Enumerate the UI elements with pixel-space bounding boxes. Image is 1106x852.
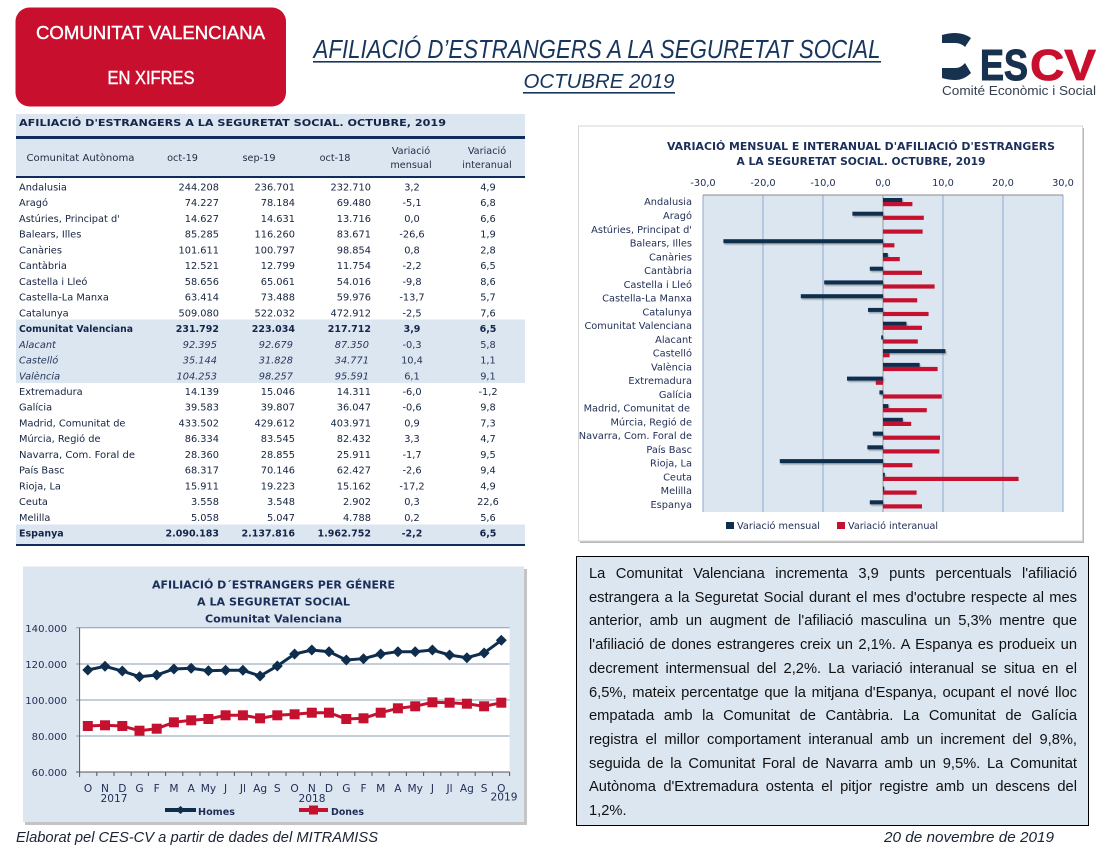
text block: commentary: decrement intermensual del 2,2%. La variació interanual se situa en el <box>589 661 1077 677</box>
bar chart category labels: Castelló <box>653 348 692 360</box>
table rows: 2.137.816 <box>242 529 295 540</box>
line chart x axis labels: 2017 <box>101 793 127 805</box>
table rows: 6,5 <box>480 529 496 540</box>
table rows: -17,2 <box>399 481 425 492</box>
table rows: -1,2 <box>478 387 498 398</box>
table rows: Extremadura <box>19 387 83 398</box>
highlighted rows background <box>16 320 525 383</box>
table rows: 4,9 <box>480 182 496 194</box>
table header: oct-19 <box>167 153 198 164</box>
footer: source: Elaborat pel CES-CV a partir de dades del MITRAMISS <box>16 830 378 846</box>
table rows: 9,1 <box>480 371 496 382</box>
table rows: 14.631 <box>261 214 295 225</box>
main title: AFILIACIÓ D’ESTRANGERS A LA SEGURETAT SOCIAL <box>312 35 881 64</box>
table header: interanual <box>462 160 512 171</box>
table rows: 6,5 <box>480 261 496 272</box>
table rows: -26,6 <box>399 230 425 241</box>
panel: bar chart monthly and yearly variation <box>578 126 1084 543</box>
table rows: -5,1 <box>402 198 422 209</box>
table rows: 12.521 <box>185 261 219 272</box>
bar chart title: VARIACIÓ MENSUAL E INTERANUAL D'AFILIACIÓ D'ESTRANGERS <box>667 140 1055 153</box>
bar chart category labels: Madrid, Comunitat de <box>584 404 690 414</box>
bar chart top axis labels: -10,0 <box>810 178 836 189</box>
table rows: 231.792 <box>176 324 219 335</box>
table rows: 63.414 <box>185 293 219 304</box>
table header: Variació <box>468 145 506 157</box>
bar chart category labels: Comunitat Valenciana <box>584 321 692 332</box>
bar chart top axis labels: 10,0 <box>932 178 954 189</box>
table rows: 0,2 <box>404 513 420 524</box>
table title band: AFILIACIÓ D'ESTRANGERS A LA SEGURETAT SOCIAL. OCTUBRE, 2019 <box>19 116 446 129</box>
table rows: Canàries <box>19 244 62 256</box>
bar chart top axis labels: -20,0 <box>750 178 776 189</box>
main title: OCTUBRE 2019 <box>524 71 674 93</box>
table rows: -0,3 <box>402 340 422 351</box>
line chart x axis labels: O <box>290 783 299 795</box>
line: Dones <box>88 702 501 731</box>
bar chart category labels: Castella-La Manxa <box>602 294 692 304</box>
text block: commentary: La Comunitat Valenciana incrementa 3,9 punts percentuals l'afiliació <box>589 566 1077 582</box>
line chart x axis labels: Jl <box>239 783 246 795</box>
table rows: 83.671 <box>337 230 371 241</box>
table rows: 74.227 <box>185 198 219 209</box>
table rows: 58.656 <box>185 277 219 288</box>
table rows: 4,9 <box>480 481 496 492</box>
table header <box>16 136 525 178</box>
line chart y axis labels: 100.000 <box>25 696 67 707</box>
line chart x axis labels: M <box>169 783 178 795</box>
text block: commentary <box>576 556 1089 826</box>
table rows: 1,1 <box>480 356 496 366</box>
table rows: 522.032 <box>254 308 295 319</box>
table rows: Cantàbria <box>19 260 67 272</box>
table rows: 101.611 <box>178 245 219 256</box>
line chart x axis labels: My <box>201 783 216 795</box>
table rows: Múrcia, Regió de <box>19 433 101 445</box>
table rows: 2.090.183 <box>166 529 219 540</box>
table rows: 9,8 <box>480 403 496 414</box>
table rows: 236.701 <box>254 182 295 194</box>
line chart x axis labels: A <box>188 783 196 795</box>
table rows: Andalusia <box>19 182 67 194</box>
table rows: 14.627 <box>185 214 219 225</box>
table rows: Navarra, Com. Foral de <box>19 450 135 461</box>
table rows: -6,0 <box>402 387 422 398</box>
line chart x axis labels: Jl <box>446 783 453 795</box>
table rows: Madrid, Comunitat de <box>19 418 125 430</box>
table rows: Castella-La Manxa <box>19 293 109 304</box>
bar chart category labels: Alacant <box>655 335 692 346</box>
badge: Comunitat Valenciana en xifres: COMUNITAT VALENCIANA <box>36 22 266 43</box>
text block: commentary: registra el millor comportament interanual amb un increment del 9,8%, <box>589 732 1077 748</box>
bar chart category labels: Múrcia, Regió de <box>610 416 692 428</box>
table rows: 2,8 <box>480 245 496 256</box>
table rows: -2,6 <box>402 466 422 477</box>
table rows: Rioja, La <box>19 481 61 492</box>
table rows: 22,6 <box>477 497 499 508</box>
table rows: 65.061 <box>261 277 295 288</box>
table rows: 223.034 <box>252 324 295 335</box>
bar chart category labels <box>579 197 692 511</box>
bar chart plot area <box>703 195 1063 512</box>
bar chart top axis labels: 20,0 <box>992 178 1014 189</box>
bar chart category labels: Canàries <box>649 251 692 263</box>
table rows: 68.317 <box>185 466 219 477</box>
line chart x axis labels: A <box>394 783 402 795</box>
text block: commentary: estrangera a la Seguretat Social durant el mes d'octubre respecte al mes <box>589 590 1077 606</box>
table rows: 5.058 <box>191 513 219 524</box>
line chart x axis labels: O <box>497 783 505 795</box>
table rows: 28.360 <box>185 450 219 461</box>
table rows: 8,6 <box>480 277 496 288</box>
table rows: 10,4 <box>401 356 423 366</box>
line chart x axis labels: Ag <box>253 783 267 795</box>
table rows: 6,6 <box>480 214 496 225</box>
table rows: -2,2 <box>402 529 422 540</box>
table rows: 34.771 <box>335 356 369 366</box>
table rows: 104.253 <box>176 371 217 382</box>
table rows: 3.558 <box>191 497 219 508</box>
table rows: Comunitat Valenciana <box>19 324 133 335</box>
table rows: Alacant <box>18 340 57 351</box>
table rows: 403.971 <box>330 418 371 430</box>
line chart x axis labels: F <box>154 783 160 795</box>
bar chart category labels: Balears, Illes <box>630 238 692 250</box>
table rows: 0,8 <box>404 245 420 256</box>
line chart legend: Homes <box>198 807 235 818</box>
text block: commentary: seguida de la Comunitat Foral de Navarra amb un 9,5%. La Comunitat <box>589 756 1077 772</box>
line chart x axis labels <box>84 783 517 805</box>
table rows: 7,6 <box>480 308 496 319</box>
table rows: 0,0 <box>404 214 420 225</box>
bar chart legend <box>726 521 938 532</box>
bar chart title: A LA SEGURETAT SOCIAL. OCTUBRE, 2019 <box>736 156 986 168</box>
line chart plot area <box>80 628 510 772</box>
bar chart category labels: Espanya <box>650 500 692 511</box>
line chart y axis labels: 120.000 <box>25 660 67 671</box>
table rows: 116.260 <box>254 230 295 241</box>
table rows: Melilla <box>19 513 50 524</box>
table rows: València <box>19 370 60 382</box>
table rows: 28.855 <box>261 450 295 461</box>
bar chart category labels: Astúries, Principat d' <box>591 224 692 236</box>
table rows: 25.911 <box>337 450 371 461</box>
table rows: 95.591 <box>335 371 369 382</box>
table rows: 5,7 <box>480 293 496 304</box>
line chart x axis labels: 2019 <box>491 792 517 804</box>
text block: commentary: anterior, amb un augment de l'afiliació masculina un 5,3% mentre que <box>589 613 1077 629</box>
table rows: 0,3 <box>404 497 420 508</box>
table rows: 12.799 <box>261 261 295 272</box>
line chart x axis labels: S <box>481 783 488 795</box>
table rows: 11.754 <box>337 261 371 272</box>
line chart x axis labels: 2018 <box>299 793 326 805</box>
line chart title: A LA SEGURETAT SOCIAL <box>197 596 350 608</box>
line chart title: AFILIACIÓ D´ESTRANGERS PER GÉNERE <box>152 578 395 592</box>
table rows: 15.162 <box>337 481 371 492</box>
table rows: 85.285 <box>185 230 219 241</box>
bar chart category labels: Navarra, Com. Foral de <box>579 431 692 442</box>
table rows: 1.962.752 <box>318 529 371 540</box>
table rows: -9,8 <box>402 277 422 288</box>
bars: variació mensual <box>723 198 945 504</box>
table rows: -1,7 <box>402 450 422 461</box>
table rows: 87.350 <box>335 340 369 351</box>
badge: Comunitat Valenciana en xifres <box>16 8 286 106</box>
table rows: 31.828 <box>259 356 293 366</box>
logo: CES-CV: Comité Econòmic i Social <box>942 83 1096 98</box>
table rows: Ceuta <box>19 497 48 508</box>
table rows: Catalunya <box>19 308 69 319</box>
table rows: 2.902 <box>343 497 371 508</box>
table rows: 3.548 <box>267 497 295 508</box>
bar chart category labels: València <box>651 361 692 373</box>
table rows: 70.146 <box>261 466 295 477</box>
table rows: 5,8 <box>480 340 496 351</box>
table rows: 232.710 <box>330 182 371 194</box>
text block: commentary: 6,5%, mateix percentatge que la mitjana d'Espanya, ocupant el nové lloc <box>589 684 1077 700</box>
table rows: País Basc <box>19 465 65 477</box>
line chart x axis labels: J <box>430 783 434 795</box>
bar chart top axis labels <box>690 178 1074 189</box>
panel: line chart by gender <box>23 566 527 825</box>
line chart legend <box>165 806 364 818</box>
line chart x axis labels: J <box>223 783 227 795</box>
bar chart category labels: Cantàbria <box>644 265 692 277</box>
table rows: 78.184 <box>261 198 295 209</box>
table rows: 39.807 <box>261 403 295 414</box>
table rows: 5,6 <box>480 513 496 524</box>
table rows: 13.716 <box>337 214 371 225</box>
table rows: 217.712 <box>328 324 371 335</box>
table rows: -2,5 <box>402 308 422 319</box>
table header: Comunitat Autònoma <box>26 152 135 164</box>
bar chart category labels: País Basc <box>646 444 692 456</box>
line chart title <box>152 578 395 626</box>
table rows: -13,7 <box>399 293 425 304</box>
table rows: 6,5 <box>480 324 496 335</box>
bar chart legend: Variació interanual <box>848 521 938 532</box>
table rows: Aragó <box>19 197 48 209</box>
table rows: Castella i Lleó <box>19 276 87 288</box>
table rows: 62.427 <box>337 466 371 477</box>
table rows: 15.911 <box>185 481 219 492</box>
line chart x axis labels: N <box>101 783 109 795</box>
bar chart title <box>667 140 1055 168</box>
bar chart category labels: Galícia <box>659 389 692 401</box>
table rows: 83.545 <box>261 434 295 445</box>
bar chart legend: Variació mensual <box>737 521 820 532</box>
table rows: 7,3 <box>480 418 496 430</box>
bar chart category labels: Ceuta <box>663 472 692 483</box>
table rows: 59.976 <box>337 293 371 304</box>
bar chart category labels: Melilla <box>661 486 692 497</box>
table rows: 92.679 <box>259 340 293 351</box>
table rows: 3,9 <box>404 324 420 335</box>
table rows: 6,8 <box>480 198 496 209</box>
line chart x axis labels: F <box>360 783 367 795</box>
line chart x axis labels: G <box>135 783 144 795</box>
line chart x axis labels: My <box>407 783 423 795</box>
line chart x axis labels: Ag <box>460 783 474 795</box>
table rows: 54.016 <box>337 277 371 288</box>
table rows: 9,4 <box>480 466 496 477</box>
table rows: 39.583 <box>185 403 219 414</box>
table rows: 0,9 <box>404 418 420 430</box>
main title <box>312 35 881 94</box>
table rows: Espanya <box>19 529 64 540</box>
data table <box>16 114 525 546</box>
table rows: 3,2 <box>404 182 420 194</box>
table rows: 69.480 <box>337 198 371 209</box>
total row background <box>16 524 525 544</box>
logo: CES-CV: CV <box>1030 41 1097 90</box>
bar chart top axis labels: 30,0 <box>1052 178 1074 189</box>
table rows: Galícia <box>19 402 52 414</box>
line chart title: Comunitat Valenciana <box>205 614 342 626</box>
table rows: 35.144 <box>183 356 217 366</box>
table rows: 244.208 <box>178 182 219 194</box>
line chart legend: Dones <box>331 807 364 818</box>
line chart y axis labels: 140.000 <box>25 624 67 635</box>
bar chart category labels: Rioja, La <box>650 458 692 470</box>
table rows: 5.047 <box>267 513 295 524</box>
text block: commentary: empatada amb la Comunitat de Cantàbria. La Comunitat de Galícia <box>589 708 1077 724</box>
table header: sep-19 <box>243 153 275 164</box>
table rows: 82.432 <box>337 434 371 445</box>
line chart x axis labels: M <box>376 783 385 795</box>
line chart x axis labels: D <box>118 783 126 795</box>
logo: CES-CV: ES <box>980 41 1028 90</box>
table rows: Castelló <box>19 354 58 366</box>
badge: Comunitat Valenciana en xifres: EN XIFRES <box>108 67 194 88</box>
table rows: 100.797 <box>254 245 295 256</box>
table header: Variació <box>392 145 430 157</box>
line: Homes <box>88 640 501 677</box>
bar chart top axis labels: -30,0 <box>690 178 716 189</box>
table title band <box>16 114 525 136</box>
table rows: 92.395 <box>183 340 217 351</box>
table rows: Astúries, Principat d' <box>19 213 120 225</box>
bar chart category labels: Catalunya <box>642 307 692 318</box>
table rows: 19.223 <box>261 481 295 492</box>
line chart x axis labels: S <box>274 783 281 795</box>
table rows: 509.080 <box>178 308 219 319</box>
table rows: 98.257 <box>259 371 294 382</box>
table rows: 14.139 <box>185 387 219 398</box>
table rows: 429.612 <box>254 418 295 430</box>
table rows: 4.788 <box>343 513 371 524</box>
table rows: 472.912 <box>330 308 371 319</box>
table rows: 98.854 <box>337 245 371 256</box>
line chart x axis labels: D <box>325 783 333 795</box>
table rows: 3,3 <box>404 434 420 445</box>
line chart y axis labels <box>25 624 67 779</box>
table header: mensual <box>390 160 432 171</box>
table rows <box>18 182 499 540</box>
table rows: 86.334 <box>185 434 219 445</box>
table rows: 15.046 <box>261 387 295 398</box>
table rows: Balears, Illes <box>19 230 81 241</box>
table rows: 14.311 <box>337 387 371 398</box>
table rows: 9,5 <box>480 450 496 461</box>
bar chart category labels: Aragó <box>663 210 692 222</box>
logo: CES-CV <box>942 33 1097 98</box>
table rows: 6,1 <box>404 371 420 382</box>
text block: commentary: Autònoma d'Extremadura ostenta el pitjor registre amb un descens del <box>589 779 1077 795</box>
line chart y axis labels: 80.000 <box>32 732 67 743</box>
bar chart category labels: Castella i Lleó <box>624 279 692 291</box>
text block: commentary: l'afiliació de dones estrangeres creix un 2,1%. A Espanya es produeix un <box>589 637 1077 653</box>
bars: variació interanual <box>876 202 1019 508</box>
line chart x axis labels: N <box>308 783 316 795</box>
table rows: 4,7 <box>480 434 496 445</box>
table rows: 73.488 <box>261 293 295 304</box>
bar chart category labels: Andalusia <box>644 197 692 208</box>
line chart x axis labels: O <box>84 783 92 795</box>
text block: commentary: 1,2%. <box>589 803 627 819</box>
table rows: 36.047 <box>337 403 371 414</box>
line chart y axis labels: 60.000 <box>32 768 67 779</box>
table rows: 1,9 <box>480 230 496 241</box>
table rows: -2,2 <box>402 261 422 272</box>
footer: date: 20 de novembre de 2019 <box>883 830 1054 846</box>
table rows: -0,6 <box>402 403 422 414</box>
line chart x axis labels: G <box>342 783 350 795</box>
table rows: 433.502 <box>178 418 219 430</box>
table header: oct-18 <box>320 153 350 164</box>
bar chart category labels: Extremadura <box>628 376 692 387</box>
bar chart top axis labels: 0,0 <box>875 178 891 189</box>
